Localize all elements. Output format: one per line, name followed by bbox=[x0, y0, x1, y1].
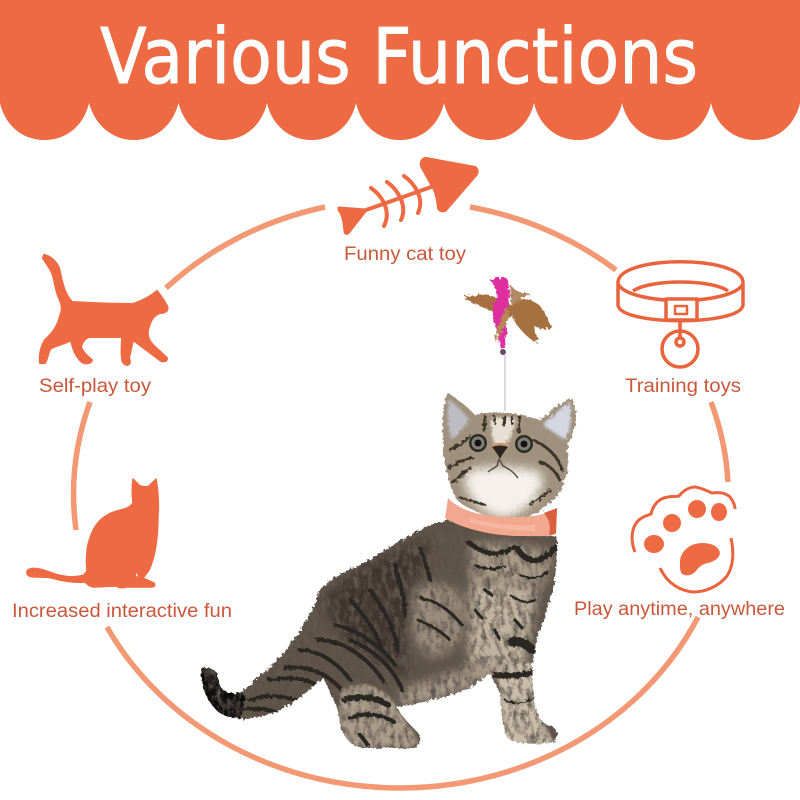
icon: walking cat silhouette bbox=[40, 255, 168, 365]
label: self-play toy: Self-play toy bbox=[39, 376, 152, 397]
icon: sitting cat silhouette bbox=[27, 479, 158, 588]
ring of arc segments bbox=[74, 207, 728, 788]
icon: collar with tag bbox=[618, 262, 743, 367]
cat body bbox=[200, 519, 558, 749]
pink collar bbox=[445, 498, 557, 536]
cat eyes bbox=[469, 434, 533, 453]
label: play anytime anywhere: Play anytime, anywhere bbox=[574, 599, 785, 620]
label: increased interactive fun: Increased interactive fun bbox=[12, 601, 232, 622]
header banner with scalloped edge bbox=[0, 0, 800, 140]
wand stick bbox=[504, 355, 506, 411]
feather wand toy bbox=[463, 278, 552, 411]
icon: paw print bbox=[632, 487, 735, 592]
icon: fish skeleton bbox=[339, 159, 477, 233]
kitten photo illustration bbox=[190, 393, 576, 755]
cat head bbox=[443, 393, 576, 519]
label: funny cat toy: Funny cat toy bbox=[344, 244, 467, 265]
title: Various Functions bbox=[100, 13, 698, 102]
cat nose and mouth bbox=[488, 443, 518, 478]
label: training toys: Training toys bbox=[625, 376, 741, 397]
